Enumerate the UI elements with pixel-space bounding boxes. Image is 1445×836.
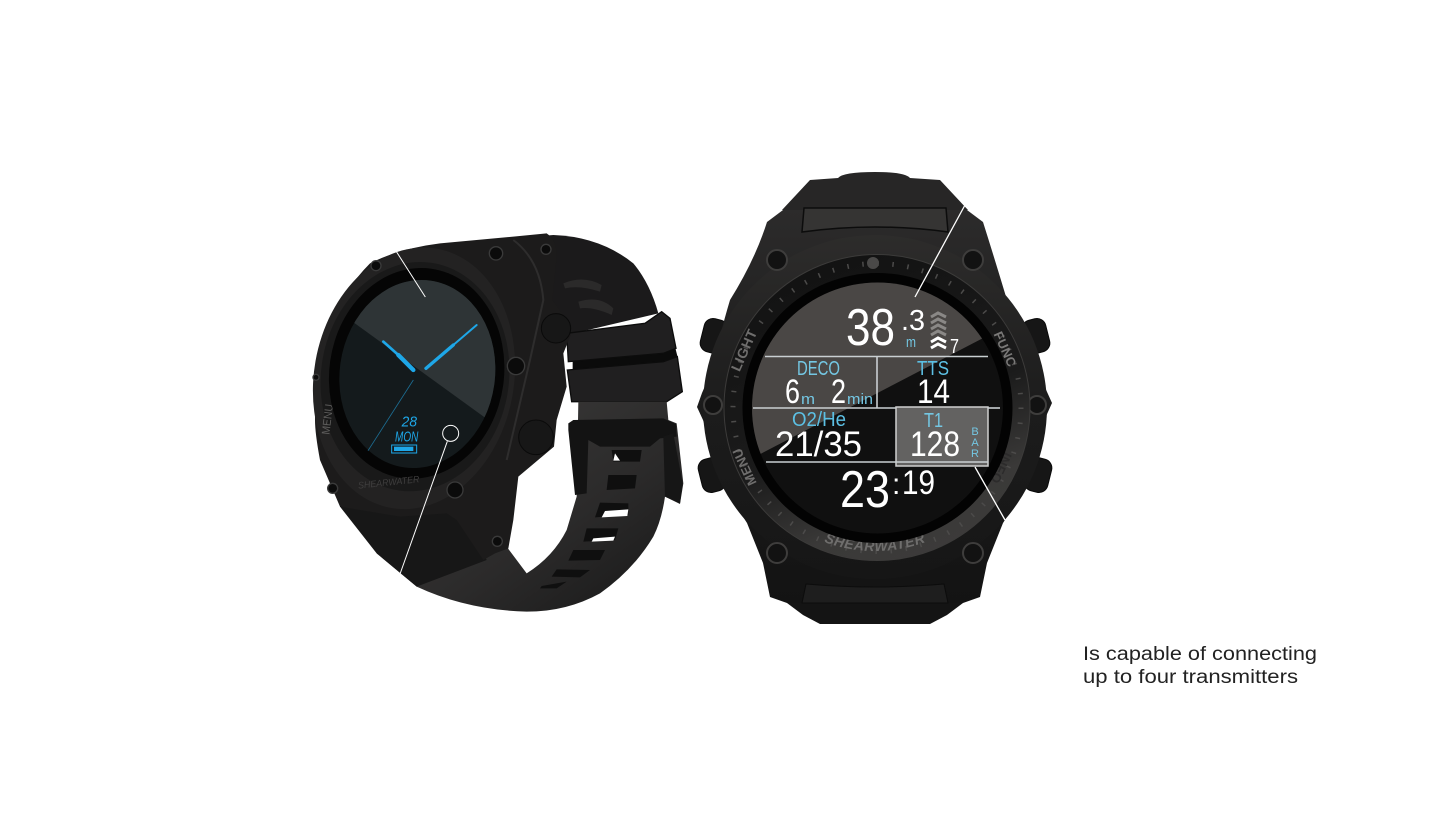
pressure unit xyxy=(971,426,979,460)
top strap xyxy=(782,172,968,210)
black ring xyxy=(315,257,518,490)
bezel label FUNC: FUNC xyxy=(991,329,1020,370)
infographic: two watches with callouts xyxy=(312,172,1316,687)
caption xyxy=(1083,644,1317,688)
stop count: 7 xyxy=(950,336,959,358)
lower dark face xyxy=(340,323,484,468)
black ring xyxy=(742,273,1012,543)
pressure unit: R xyxy=(971,448,979,460)
clock colon: : xyxy=(892,468,900,501)
bezel xyxy=(293,231,535,525)
crown buttons xyxy=(519,314,571,455)
watch hands xyxy=(383,325,477,370)
TTS label: TTS xyxy=(917,358,949,380)
callout line: top xyxy=(396,251,425,297)
case xyxy=(697,210,1052,603)
light face xyxy=(752,282,982,454)
bottom strap xyxy=(787,590,963,624)
strap inset top xyxy=(802,208,948,232)
depth unit: m xyxy=(906,334,916,351)
bezel ticks xyxy=(733,264,1021,552)
bezel ring xyxy=(724,254,1030,560)
callout line: top xyxy=(915,205,965,297)
clock hours: 23 xyxy=(840,461,890,519)
bezel xyxy=(703,235,1047,579)
O2/He label: O2/He xyxy=(792,409,846,431)
deco time unit: min xyxy=(847,391,873,408)
bezel label: MENU xyxy=(320,403,336,435)
pressure unit: B xyxy=(971,426,979,438)
deco depth unit: m xyxy=(801,391,815,408)
side buttons xyxy=(696,317,1054,494)
right watch, front view xyxy=(697,172,1052,624)
bezel brand: SHEARWATER xyxy=(357,474,420,491)
T1 label: T1 xyxy=(924,410,943,432)
depth: 38 xyxy=(846,299,895,357)
hour hand xyxy=(398,355,413,370)
rear strap xyxy=(533,235,658,335)
screen xyxy=(340,280,496,468)
screws xyxy=(704,250,1046,563)
lower lug strap xyxy=(340,492,487,587)
ascent chevrons xyxy=(931,313,946,348)
T1 box xyxy=(896,407,988,466)
bezel label LIGHT: LIGHT xyxy=(728,326,760,374)
strap holes xyxy=(540,450,642,588)
deco depth: 6 xyxy=(785,373,800,411)
clock minutes: 19 xyxy=(902,464,935,502)
screen xyxy=(745,280,1010,536)
buckle edge xyxy=(663,433,683,503)
pressure unit: A xyxy=(971,437,979,449)
screws xyxy=(313,244,551,546)
logo mark xyxy=(867,257,879,269)
strap inset bottom xyxy=(802,584,948,603)
bezel label INFO: INFO xyxy=(987,450,1015,486)
TTS value: 14 xyxy=(917,373,950,411)
callout marker xyxy=(443,425,459,441)
weekday: MON xyxy=(395,430,419,446)
strap hole highlights xyxy=(592,453,628,542)
caption line 2: up to four transmitters xyxy=(1083,667,1298,688)
strap keepers xyxy=(567,312,682,402)
callout line: bottom xyxy=(975,467,1005,520)
callout line: bottom xyxy=(400,441,447,574)
minute hand xyxy=(426,345,453,368)
gas mix: 21/35 xyxy=(775,425,862,464)
lower strap with buckle xyxy=(377,402,683,612)
dark face xyxy=(761,339,1003,534)
depth decimal: .3 xyxy=(901,305,925,337)
left watch, angled view xyxy=(293,231,683,612)
date: 28 xyxy=(401,415,418,431)
second hand xyxy=(368,380,413,451)
bezel label MENU: MENU xyxy=(729,446,760,488)
case side crease xyxy=(507,240,543,460)
watch case xyxy=(315,233,571,560)
upper light face xyxy=(354,280,496,417)
buckle xyxy=(568,418,677,495)
caption line 1: Is capable of connecting xyxy=(1083,644,1317,665)
upper strap slots xyxy=(563,280,613,315)
deco time: 2 xyxy=(831,373,846,411)
screen dividers xyxy=(753,356,1000,462)
gap behind keepers xyxy=(573,347,678,372)
DECO label: DECO xyxy=(797,358,840,380)
battery xyxy=(392,445,417,453)
tank pressure: 128 xyxy=(910,425,960,464)
brand on bezel: SHEARWATER xyxy=(824,534,924,552)
